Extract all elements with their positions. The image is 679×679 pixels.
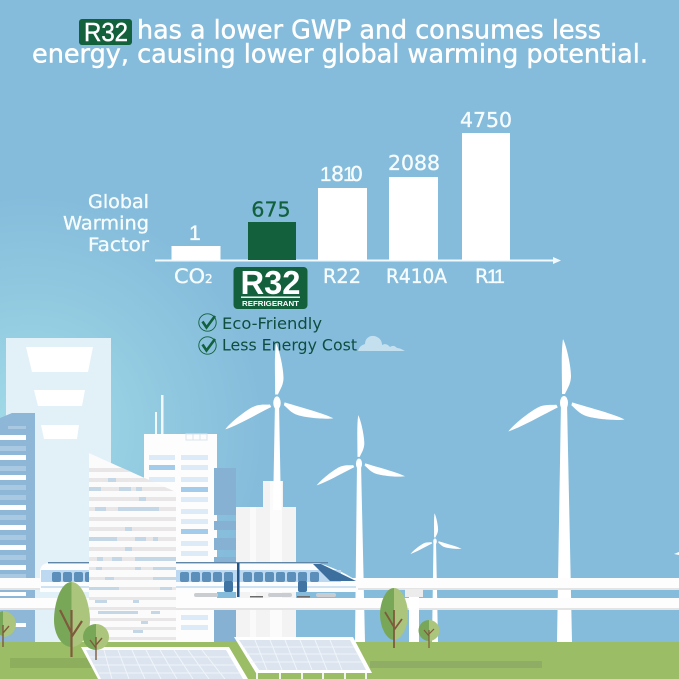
tree right large: [380, 588, 408, 648]
wind turbine 1: [222, 343, 334, 510]
bar: R22: 1: [343, 163, 354, 186]
axis label: Global Warming Factor: Global: [88, 191, 149, 213]
solar panel right: [234, 637, 372, 679]
R32 refrigerant badge: R32: [240, 264, 300, 301]
title: R32: [84, 17, 128, 47]
tall pale tower: [6, 338, 111, 642]
bar: R22: 1: [320, 163, 331, 186]
bar: R32: [248, 198, 296, 260]
bar: R11: 1: [487, 266, 498, 288]
wind turbine 5 partial: [674, 552, 679, 555]
wind turbine 3: [409, 513, 462, 642]
title: has a lower GWP and consumes less: [137, 16, 601, 46]
bar: R22: 0: [350, 162, 363, 186]
tree large left: [54, 582, 90, 657]
bar: R410A: [386, 151, 448, 288]
bar: R22: R22: [323, 265, 361, 288]
tree right small: [418, 620, 440, 648]
bar: CO2: CO: [174, 265, 205, 288]
axis label: Global Warming Factor: Warming: [63, 212, 149, 234]
bar: R11: 4750: [460, 108, 512, 132]
R32 refrigerant badge: [234, 264, 308, 309]
ground: [0, 642, 679, 679]
tree edge left: [0, 611, 16, 647]
factory: [236, 481, 296, 640]
bar: R11: 1: [494, 266, 505, 288]
bar: R32: 675: [251, 198, 291, 222]
bar: R410A: 2088: [388, 151, 440, 175]
title: energy, causing lower global warming potential.: [32, 40, 648, 70]
bar: CO2: 2: [205, 272, 213, 286]
blue striped building: [0, 413, 35, 642]
striped building: [89, 453, 176, 646]
axis label: Global Warming Factor: Factor: [88, 234, 149, 256]
benefit: Eco-Friendly: Eco-Friendly: [222, 314, 322, 333]
white office building: [144, 395, 217, 642]
R32 refrigerant badge: REFRIGERANT: [242, 299, 299, 308]
bar: R22: 8: [331, 162, 344, 186]
bar: CO2: 1: [189, 222, 201, 245]
solar panel left: [81, 647, 248, 679]
bar: R22: [318, 162, 367, 288]
train: [40, 562, 358, 598]
tree small left: [83, 624, 109, 660]
bar chart: [155, 108, 561, 288]
axis label: Global Warming Factor: [63, 191, 149, 256]
bar: R11: [460, 108, 512, 288]
wind turbine 4: [505, 339, 625, 642]
chart axis: [155, 257, 561, 264]
bar: R11: R: [475, 265, 489, 288]
R32 title chip: [79, 19, 132, 45]
title: [32, 16, 648, 70]
cloud: [358, 336, 405, 351]
blue block building: [214, 468, 236, 642]
benefit: Less Energy Cost: Less Energy Cost: [222, 336, 357, 354]
wind turbine 2: [314, 415, 405, 642]
elevated railway: [0, 578, 679, 642]
bar: CO2: [172, 222, 220, 288]
bar: R410A: R410A: [386, 265, 448, 288]
